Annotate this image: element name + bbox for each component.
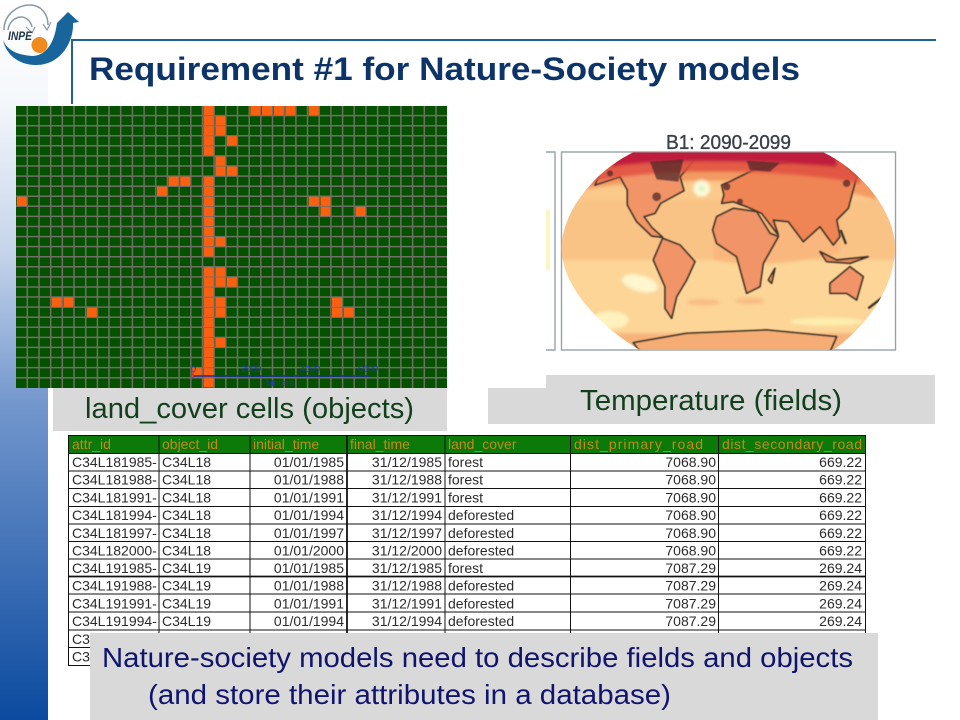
table rows: C34L191991- bbox=[72, 595, 157, 611]
callout: conclusion: Nature-society models need to describe fields and objects bbox=[102, 642, 853, 673]
background side gradient bbox=[0, 0, 48, 720]
table rows: 01/01/1985 bbox=[274, 454, 344, 470]
table header row bbox=[68, 435, 866, 453]
table rows: C34L181988- bbox=[72, 472, 157, 488]
map scale bar: 2000 bbox=[241, 364, 261, 374]
attribute table bbox=[68, 435, 866, 666]
table rows: 669.22 bbox=[819, 525, 862, 541]
table rows: 31/12/1997 bbox=[372, 525, 442, 541]
table header row: dist_primary_road bbox=[574, 436, 703, 452]
map scale bar: 4000 bbox=[300, 364, 320, 374]
logo: INPE: INPE bbox=[8, 29, 33, 43]
table rows: 7068.90 bbox=[665, 542, 716, 558]
table rows: 31/12/1994 bbox=[372, 613, 442, 629]
table header row: initial_time bbox=[253, 436, 319, 452]
table grid lines bbox=[68, 435, 866, 666]
title: Requirement #1 for Nature-Society models bbox=[89, 51, 800, 87]
table rows: C34L18 bbox=[162, 489, 211, 505]
table rows: forest bbox=[448, 472, 483, 488]
table rows: 01/01/1994 bbox=[274, 613, 344, 629]
table header row: land_cover bbox=[448, 436, 517, 452]
deforested cells in orange bbox=[17, 106, 365, 388]
table rows: C34L182000- bbox=[72, 542, 157, 558]
table rows: C34L181997- bbox=[72, 525, 157, 541]
header rule lines bbox=[72, 40, 936, 104]
logo: INPE bbox=[3, 5, 79, 65]
table rows bbox=[72, 454, 862, 664]
table rows: 31/12/1991 bbox=[372, 489, 442, 505]
table rows: 7068.90 bbox=[665, 507, 716, 523]
table rows: 01/01/2000 bbox=[274, 542, 344, 558]
table header row: object_id bbox=[162, 436, 218, 452]
map scale bar: 0 bbox=[191, 364, 196, 374]
table rows: 669.22 bbox=[819, 454, 862, 470]
table rows: 31/12/1985 bbox=[372, 560, 442, 576]
table rows: 269.24 bbox=[819, 578, 862, 594]
table rows: deforested bbox=[448, 507, 514, 523]
table rows: C34L181991- bbox=[72, 489, 157, 505]
table rows: forest bbox=[448, 454, 483, 470]
table rows: deforested bbox=[448, 525, 514, 541]
globe with temperature bands and continents bbox=[560, 150, 897, 353]
table rows: 01/01/1988 bbox=[274, 578, 344, 594]
table rows: C34L19 bbox=[162, 578, 211, 594]
table rows: C34L18 bbox=[162, 525, 211, 541]
map scale bar: Meters bbox=[266, 378, 294, 388]
table rows: C34L191985- bbox=[72, 560, 157, 576]
table rows: 269.24 bbox=[819, 595, 862, 611]
table rows: C34L19 bbox=[162, 560, 211, 576]
table rows: C34L19 bbox=[162, 613, 211, 629]
table rows: 7068.90 bbox=[665, 525, 716, 541]
table rows: 7068.90 bbox=[665, 454, 716, 470]
table rows: 669.22 bbox=[819, 542, 862, 558]
polar warming bands bbox=[590, 150, 860, 183]
label: temperature fields bbox=[488, 375, 935, 424]
table rows: C34L191988- bbox=[72, 578, 157, 594]
table rows: 31/12/1994 bbox=[372, 507, 442, 523]
table rows: 7087.29 bbox=[665, 595, 716, 611]
table header row: final_time bbox=[350, 436, 410, 452]
table rows: 669.22 bbox=[819, 489, 862, 505]
table rows: 31/12/1991 bbox=[372, 595, 442, 611]
table rows: 31/12/1988 bbox=[372, 472, 442, 488]
table rows: 01/01/1991 bbox=[274, 489, 344, 505]
land cover cell grid map bbox=[16, 106, 447, 388]
table rows: 7087.29 bbox=[665, 613, 716, 629]
map scale bar: 6000 bbox=[358, 364, 378, 374]
table rows: C34L18 bbox=[162, 507, 211, 523]
table rows: C34L19 bbox=[162, 595, 211, 611]
table rows: deforested bbox=[448, 613, 514, 629]
map scale bar bbox=[191, 364, 378, 388]
table rows: 269.24 bbox=[819, 613, 862, 629]
table rows: 7087.29 bbox=[665, 560, 716, 576]
continents bbox=[595, 153, 883, 352]
table rows: forest bbox=[448, 489, 483, 505]
neighbouring map fragment bbox=[546, 152, 555, 350]
table rows: C34L18 bbox=[162, 542, 211, 558]
table rows: 01/01/1985 bbox=[274, 560, 344, 576]
table rows: 31/12/1985 bbox=[372, 454, 442, 470]
table rows: 31/12/1988 bbox=[372, 578, 442, 594]
table rows: 7087.29 bbox=[665, 578, 716, 594]
callout: conclusion: (and store their attributes in a database) bbox=[148, 679, 671, 710]
polar dark speckle bbox=[607, 159, 850, 205]
label: land cover cells bbox=[53, 388, 447, 431]
table rows: C34L181985- bbox=[72, 454, 157, 470]
table rows: C3 bbox=[72, 631, 90, 647]
table rows: 01/01/1997 bbox=[274, 525, 344, 541]
temperature world map bbox=[546, 132, 897, 353]
table rows: 269.24 bbox=[819, 560, 862, 576]
table rows: 31/12/2000 bbox=[372, 542, 442, 558]
table rows: deforested bbox=[448, 578, 514, 594]
callout: conclusion bbox=[90, 633, 878, 720]
table header row: dist_secondary_road bbox=[722, 436, 862, 452]
table rows: 01/01/1988 bbox=[274, 472, 344, 488]
map frame bbox=[562, 152, 896, 350]
table rows: deforested bbox=[448, 595, 514, 611]
table rows: 669.22 bbox=[819, 472, 862, 488]
map title: B1: 2090-2099 bbox=[666, 132, 791, 154]
label: temperature fields: Temperature (fields) bbox=[580, 385, 842, 417]
table rows: 01/01/1994 bbox=[274, 507, 344, 523]
table rows: deforested bbox=[448, 542, 514, 558]
table rows: C34L18 bbox=[162, 472, 211, 488]
table rows: forest bbox=[448, 560, 483, 576]
table rows: C3 bbox=[72, 648, 90, 664]
table rows: 7068.90 bbox=[665, 489, 716, 505]
table rows: 01/01/1991 bbox=[274, 595, 344, 611]
table header row: attr_id bbox=[72, 436, 111, 452]
table rows: C34L191994- bbox=[72, 613, 157, 629]
table rows: 7068.90 bbox=[665, 472, 716, 488]
table rows: C34L18 bbox=[162, 454, 211, 470]
table rows: 669.22 bbox=[819, 507, 862, 523]
table rows: C34L181994- bbox=[72, 507, 157, 523]
label: land cover cells: land_cover cells (objects) bbox=[85, 393, 414, 425]
